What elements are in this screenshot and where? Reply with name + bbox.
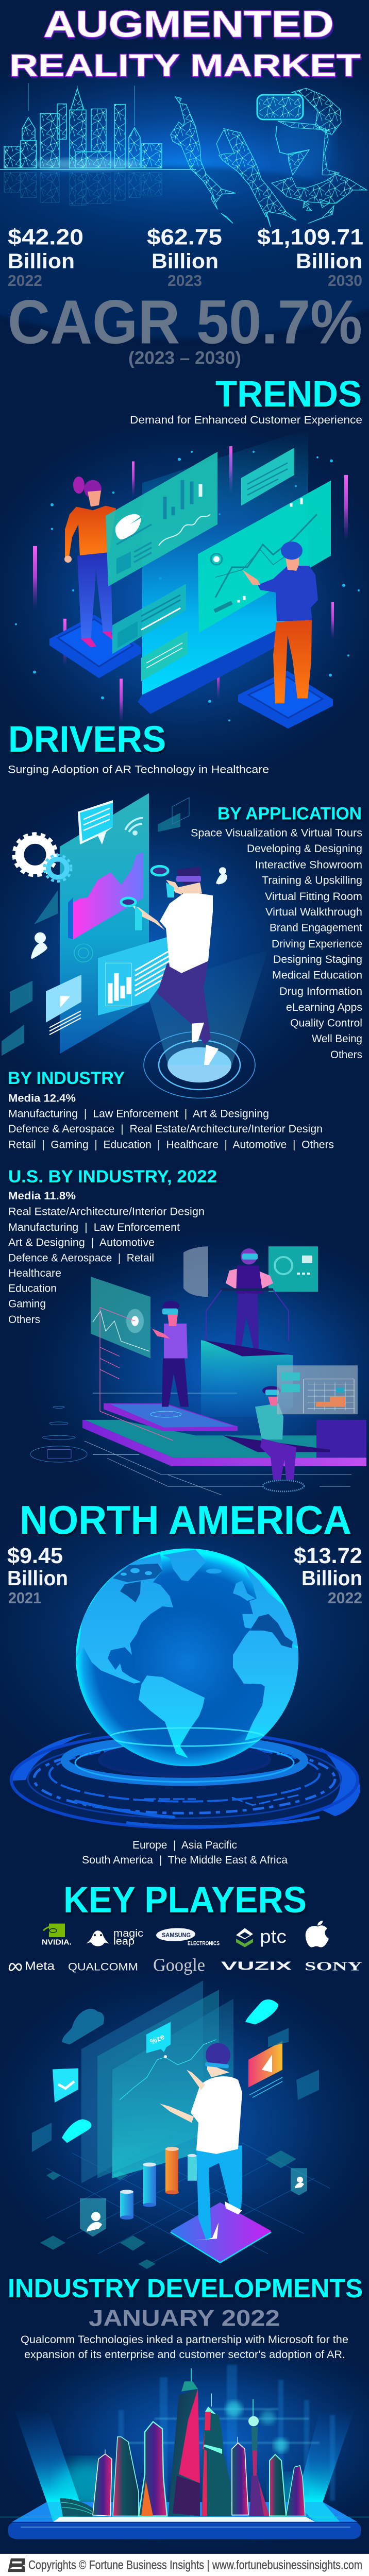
glowing dots — [15, 451, 360, 721]
by industry: BY INDUSTRY — [8, 1069, 125, 1088]
logo: NVIDIA — [42, 1924, 72, 1947]
tower 1 — [93, 2449, 112, 2516]
stat: 2022: Billion — [301, 1566, 362, 1590]
industry developments: JANUARY 2022 — [89, 2306, 280, 2331]
industry developments: Qualcomm Technologies inked a partnership with Microsoft for the — [21, 2333, 348, 2346]
video card — [46, 975, 81, 1035]
person icons — [31, 867, 227, 959]
north america heading: NORTH AMERICA — [20, 1497, 351, 1543]
industry developments: expansion of its enterprise and customer sector's adoption of AR. — [24, 2348, 345, 2361]
stat: 2030: 2030 — [328, 272, 362, 290]
trends: Demand for Enhanced Customer Experience — [130, 413, 362, 426]
data screen with chart — [91, 1277, 150, 1359]
grey info screen — [277, 1365, 358, 1414]
floating squares — [2, 798, 189, 1056]
main tower — [168, 2368, 200, 2516]
pedestal — [144, 1031, 255, 1098]
by application: Brand Engagement — [270, 921, 362, 934]
man's platform — [238, 671, 333, 728]
tower 9 — [286, 2466, 305, 2516]
continents — [75, 1549, 304, 1758]
seated man in VR — [255, 1386, 304, 1492]
analyst — [160, 2043, 242, 2240]
tablet — [0, 2502, 369, 2539]
by application: Designing Staging — [273, 953, 362, 965]
drivers: Surging Adoption of AR Technology in Healthcare — [8, 763, 269, 775]
industry developments: INDUSTRY DEVELOPMENTS — [8, 2273, 363, 2303]
title: REALITY MARKET — [9, 48, 361, 83]
other regions: Europe | Asia Pacific — [132, 1838, 237, 1851]
phone panel — [60, 793, 149, 1054]
footer bar — [0, 2554, 369, 2576]
logo: Meta — [9, 1960, 55, 1973]
U.S. by industry — [8, 1167, 217, 1326]
gears — [14, 834, 93, 962]
logo: magic leap: magic — [113, 1927, 143, 1939]
U.S. by industry: Manufacturing | Law Enforcement — [8, 1221, 180, 1233]
by application: Quality Control — [290, 1016, 362, 1029]
by application — [191, 804, 362, 1061]
raised hand — [171, 97, 236, 224]
stat: 2023: 2023 — [167, 272, 202, 290]
layered data panels — [81, 1980, 233, 2183]
logos row 1 — [42, 1921, 329, 1947]
person boxes — [80, 2168, 307, 2236]
wifi icon — [125, 818, 143, 835]
main purple platform — [82, 1420, 366, 1466]
upper platform — [104, 1403, 238, 1431]
trends — [130, 374, 362, 426]
by application: Drug Information — [279, 985, 362, 997]
TV tower — [248, 2399, 270, 2516]
stat: 2021: 2021 — [8, 1589, 41, 1607]
stat: 2023: $62.75 — [147, 225, 222, 250]
light pillars — [33, 446, 348, 722]
title: REALITY MARKET — [10, 50, 362, 86]
teal tower block — [201, 1340, 293, 1417]
bar chart card — [98, 936, 170, 1015]
dark seas and bays — [113, 1564, 293, 1648]
logo: Samsung Electronics: SAMSUNG — [162, 1931, 191, 1939]
other regions — [82, 1838, 288, 1866]
large chart panel — [198, 481, 331, 633]
clouds — [62, 1999, 278, 2143]
standing man in VR — [152, 1301, 189, 1406]
stat: 2021: $9.45 — [7, 1544, 63, 1568]
stat: 2022: 2022 — [8, 272, 42, 290]
city skyline wireframe — [4, 83, 162, 168]
tower 6 — [232, 2437, 248, 2515]
logo: magic leap: leap — [113, 1936, 135, 1947]
by industry: Media 12.4% — [8, 1092, 76, 1104]
by industry: Manufacturing | Law Enforcement | Art & Designing — [8, 1107, 269, 1120]
by industry: Defence & Aerospace | Real Estate/Architecture/Interior Design — [8, 1122, 323, 1135]
small text panel — [241, 448, 294, 506]
illustration: holographic city on a tablet — [0, 2365, 369, 2539]
U.S. by industry: U.S. BY INDUSTRY, 2022 — [8, 1167, 217, 1187]
by application: Virtual Walkthrough — [265, 905, 362, 918]
by application: Training & Upskilling — [262, 874, 362, 887]
other regions: South America | The Middle East & Africa — [82, 1853, 288, 1866]
logo: NVIDIA: NVIDIA. — [42, 1939, 72, 1947]
footer logo — [8, 2558, 25, 2572]
by application: Interactive Showroom — [255, 858, 362, 871]
U.S. by industry: Others — [8, 1313, 40, 1326]
stat: 2023: Billion — [152, 249, 219, 273]
teal panel with pie and bars — [106, 452, 217, 586]
glow arc — [110, 1728, 264, 1746]
holographic ring platform — [9, 1732, 360, 1828]
U.S. by industry: Media 11.8% — [8, 1189, 76, 1202]
city base glow — [31, 158, 144, 171]
title — [9, 3, 362, 86]
logo: Sony: SONY — [305, 1960, 362, 1974]
U.S. by industry: Education — [8, 1282, 57, 1294]
by application: eLearning Apps — [286, 1001, 362, 1013]
floor grid — [46, 2140, 330, 2264]
tall light tower — [142, 429, 308, 695]
man — [242, 541, 318, 703]
platform woman base — [204, 1340, 292, 1357]
upward light beams — [14, 2365, 355, 2516]
standing woman in VR — [206, 1248, 289, 1349]
logo: Apple — [306, 1921, 329, 1947]
logo: Meta: Meta — [25, 1960, 55, 1973]
logo: Vuzix: VUZIX — [221, 1960, 292, 1973]
logo: Samsung Electronics: ELECTRONICS — [188, 1941, 220, 1947]
illustration: analyst with data floor — [32, 1980, 330, 2269]
by application: Space Visualization & Virtual Tours — [191, 826, 362, 839]
title: AUGMENTED — [44, 6, 336, 47]
by application: Driving Experience — [272, 937, 362, 950]
U.S. by industry: Gaming — [8, 1297, 46, 1310]
speech bubble — [78, 800, 113, 844]
illustration: VR user with app panels — [2, 793, 268, 1098]
trends: TRENDS — [215, 374, 362, 415]
VR user — [121, 866, 219, 1065]
by industry — [8, 1069, 334, 1150]
stat: 2022 — [8, 225, 83, 290]
floor tiles — [40, 2150, 296, 2269]
drivers: DRIVERS — [8, 719, 166, 760]
seated platform — [223, 1435, 330, 1452]
stepped tower — [202, 2394, 232, 2516]
hero illustration: wireframe city and VR user — [0, 83, 367, 227]
woman's platform — [49, 615, 141, 678]
speech bubble — [146, 2022, 171, 2053]
purple area chart — [68, 897, 73, 939]
pink data lines — [100, 1308, 173, 1440]
by application: Well Being — [312, 1032, 362, 1045]
by application: BY APPLICATION — [217, 804, 362, 823]
stat: 2021 — [7, 1544, 68, 1607]
reflection — [4, 173, 162, 205]
U.S. by industry: Defence & Aerospace | Retail — [8, 1251, 154, 1264]
illustration: VR users on platforms — [30, 1246, 366, 1495]
right power screen — [269, 1246, 318, 1292]
check card — [53, 2068, 78, 2103]
stat: 2030 — [257, 225, 363, 290]
drivers — [8, 719, 269, 775]
stat: 2022: Billion — [8, 249, 75, 273]
stat: 2023 — [147, 225, 222, 290]
stat: 2030: Billion — [296, 249, 362, 273]
VR headset — [257, 95, 303, 120]
tower 2 — [113, 2437, 139, 2516]
by application: Medical Education — [272, 969, 362, 981]
globe — [75, 1548, 304, 1766]
by application: Developing & Designing — [247, 842, 362, 855]
stat: 2022: $42.20 — [8, 225, 83, 250]
key players heading: KEY PLAYERS — [63, 1880, 307, 1921]
industry developments — [8, 2273, 363, 2361]
illustration: two analysts with holographic screens — [15, 429, 360, 728]
stat: 2022: $13.72 — [294, 1544, 362, 1568]
arctic islands — [121, 1568, 152, 1575]
logo: Samsung Electronics — [156, 1927, 220, 1947]
logo: magic leap — [86, 1927, 143, 1947]
logo: Qualcomm: QUALCOMM — [68, 1960, 138, 1973]
VR user head and shoulders wireframe — [265, 88, 367, 227]
stadium — [60, 2498, 93, 2517]
by application: Virtual Fitting Room — [265, 890, 362, 903]
logo: ptc: ptc — [260, 1926, 287, 1947]
title: AUGMENTED — [43, 3, 334, 45]
stat: 2022 — [294, 1544, 362, 1607]
speech bubble: %ze — [149, 2033, 166, 2046]
horizon line — [0, 169, 196, 170]
skyscrapers — [93, 2368, 305, 2516]
U.S. by industry: Healthcare — [8, 1266, 61, 1279]
stat: 2021: Billion — [7, 1566, 68, 1590]
CAGR: (2023 – 2030) — [128, 348, 241, 368]
logos row 2 — [9, 1955, 362, 1975]
stat: 2022: 2022 — [328, 1589, 362, 1607]
bar cylinders — [120, 2147, 197, 2219]
woman — [64, 477, 116, 648]
left curved screen — [183, 1246, 208, 1297]
pedestal — [170, 2202, 272, 2263]
logo: ptc — [236, 1926, 287, 1947]
side squares — [32, 2028, 319, 2152]
orange media card — [248, 2041, 282, 2097]
pinching hand — [216, 129, 296, 221]
by application: Others — [330, 1048, 362, 1061]
floor lines and target rings — [30, 1393, 351, 1495]
tower 8 — [270, 2454, 286, 2516]
stat: 2030: $1,109.71 — [257, 225, 363, 250]
tower 3 — [139, 2422, 167, 2516]
lower left panels — [112, 584, 188, 681]
light beam — [146, 950, 268, 1065]
by industry: Retail | Gaming | Education | Healthcare | Automotive | Others — [8, 1138, 334, 1150]
U.S. by industry: Art & Designing | Automotive — [8, 1235, 155, 1248]
U.S. by industry: Real Estate/Architecture/Interior Design — [8, 1205, 205, 1218]
logo: Google: Google — [153, 1955, 205, 1975]
